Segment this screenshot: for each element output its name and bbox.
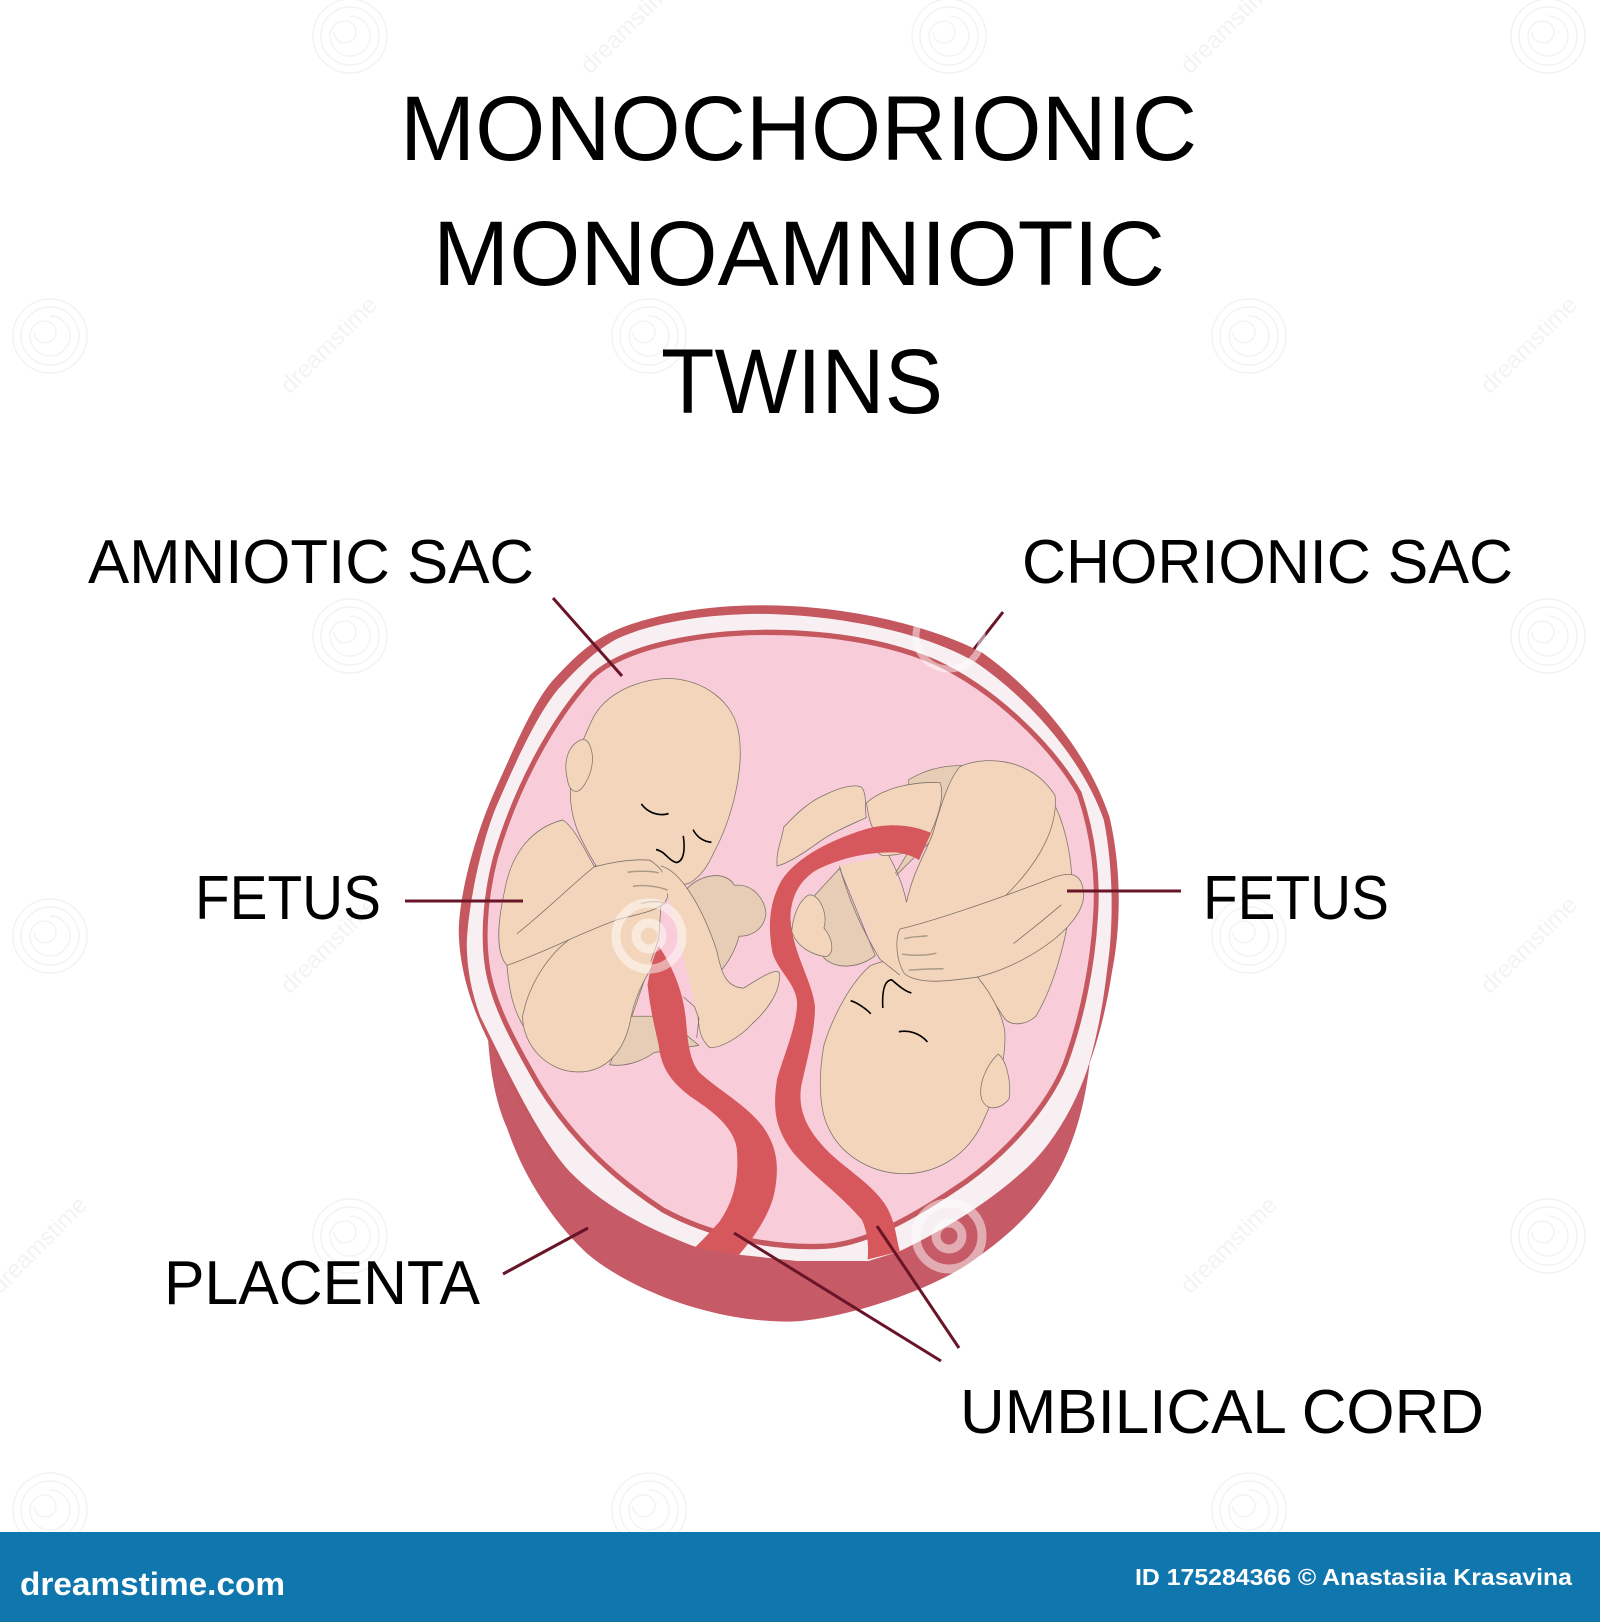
chorionic sac outer wall: [459, 605, 1119, 1254]
foot 2: [866, 782, 942, 855]
arm: [897, 874, 1084, 981]
toes: [683, 997, 699, 1038]
thigh and hip: [906, 761, 1055, 905]
head: [570, 678, 740, 890]
fingers: [902, 936, 944, 970]
foot 1: [777, 786, 866, 866]
watermark text: [0, 0, 1583, 1299]
footer credit: ID 175284366 © Anastasiia Krasavina: [1135, 1564, 1572, 1590]
face: [851, 980, 927, 1042]
fetus right: [777, 761, 1084, 1174]
watermark text: dreamstime: [1475, 291, 1583, 399]
labels: FETUS: [195, 864, 381, 933]
back limbs: [815, 766, 962, 966]
labels: CHORIONIC SAC: [1022, 528, 1513, 597]
watermark text: dreamstime: [1175, 1191, 1283, 1299]
watermark text: dreamstime: [275, 291, 383, 399]
labels: AMNIOTIC SAC: [88, 528, 534, 597]
watermark text: dreamstime: [275, 891, 383, 999]
chorionic cavity: [467, 614, 1112, 1261]
watermark on diagram: [616, 603, 982, 1269]
torso: [499, 820, 663, 1028]
labels: FETUS: [1203, 864, 1389, 933]
lower leg outline: [840, 855, 906, 975]
ear: [981, 1054, 1010, 1108]
title: [400, 78, 1197, 433]
labels: [88, 528, 1513, 1447]
torso: [931, 808, 1072, 1024]
footer logo: dreamstime.com: [20, 1566, 285, 1602]
leg and foot: [661, 866, 779, 1048]
ear: [566, 740, 592, 791]
diagram: uterus with twins: [459, 605, 1119, 1322]
umbilical cord right: [770, 825, 931, 1260]
placenta: [488, 1040, 1090, 1322]
watermark text: dreamstime: [1475, 891, 1583, 999]
arm: [507, 860, 668, 965]
labels: PLACENTA: [164, 1249, 481, 1318]
labels: UMBILICAL CORD: [960, 1378, 1484, 1447]
head: [820, 953, 1005, 1174]
pointer lines: [405, 598, 1181, 1361]
face: [641, 804, 711, 863]
umbilical cord left: [648, 946, 777, 1255]
lower leg fill: [840, 855, 1002, 975]
title: TWINS: [661, 331, 943, 433]
title: MONOAMNIOTIC: [433, 203, 1165, 305]
fingers: [627, 871, 668, 904]
thigh: [523, 934, 654, 1072]
hand: [792, 895, 832, 957]
back hand and foot: [610, 876, 766, 1065]
amniotic sac: [485, 632, 1096, 1247]
footer bar: [0, 1532, 1600, 1622]
fetus left: [499, 678, 779, 1072]
title: MONOCHORIONIC: [400, 78, 1197, 180]
arm crease: [1014, 905, 1061, 944]
